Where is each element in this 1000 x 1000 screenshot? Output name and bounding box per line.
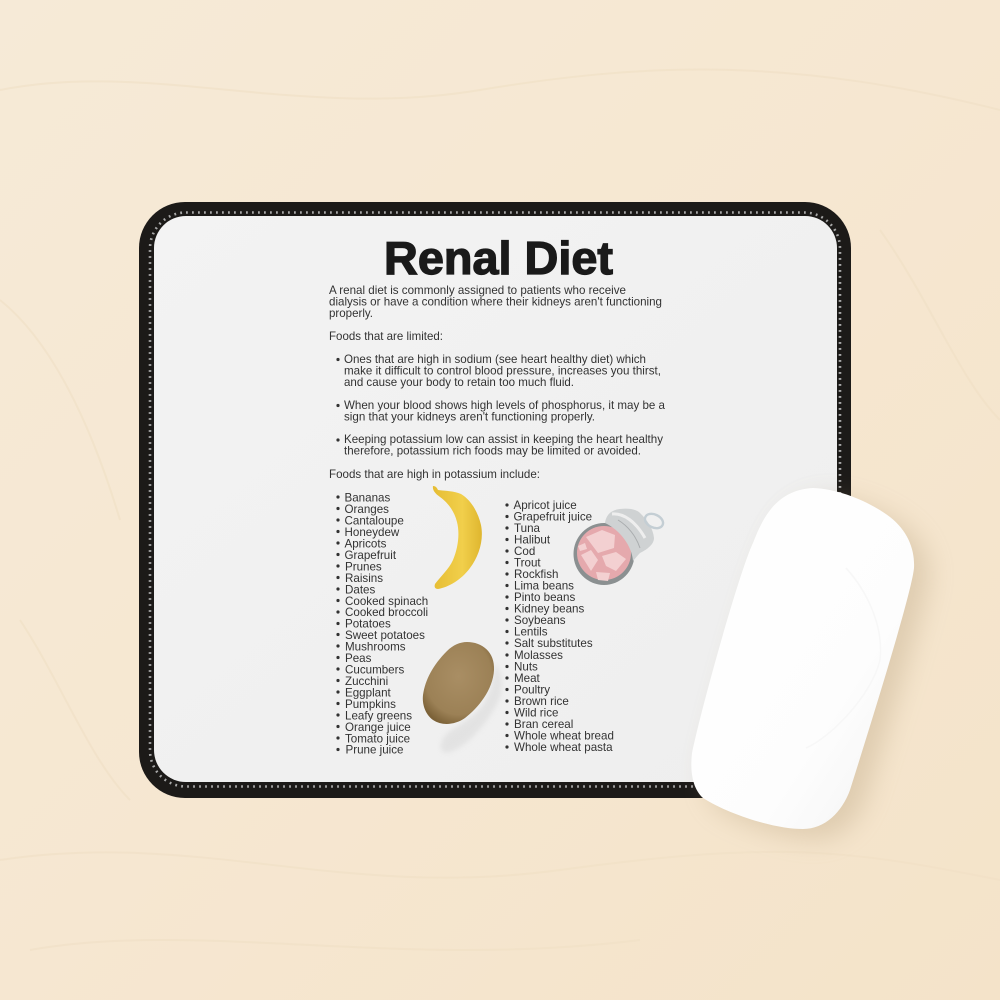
right food list: Kidney beans xyxy=(514,602,584,616)
icon: banana xyxy=(433,486,482,589)
right food list: Salt substitutes xyxy=(514,637,593,650)
right food list: Cod xyxy=(514,545,535,558)
left food list: Raisins xyxy=(345,572,383,585)
left food list: Cooked broccoli xyxy=(345,606,428,619)
left food list: Pumpkins xyxy=(345,698,396,711)
right food list: Halibut xyxy=(514,534,551,546)
right food list: Bran cereal xyxy=(514,718,573,731)
right food list: Lima beans xyxy=(514,580,574,592)
tuna meat xyxy=(577,526,631,580)
right food list: Lentils xyxy=(514,626,548,638)
left food list: Zucchini xyxy=(345,675,388,688)
mouse pad xyxy=(139,202,851,798)
mouse shadow xyxy=(706,498,929,839)
right food list: Brown rice xyxy=(514,695,569,708)
left food list: Cantaloupe xyxy=(344,514,404,528)
left food list: Bananas xyxy=(344,492,390,504)
phosphorus bullet: sign that your kidneys aren't functioning properly. xyxy=(344,410,595,424)
intro paragraph: properly. xyxy=(329,307,373,320)
right food list: Wild rice xyxy=(514,706,558,720)
phosphorus bullet: When your blood shows high levels of phosphorus, it may be a xyxy=(344,399,666,412)
right food list: Grapefruit juice xyxy=(514,510,592,524)
icon: potato xyxy=(423,642,502,753)
intro paragraph: A renal diet is commonly assigned to patients who receive xyxy=(329,284,626,297)
title: Renal Diet xyxy=(384,232,613,284)
right food list: Tuna xyxy=(514,522,541,535)
wireless mouse xyxy=(691,488,929,839)
potassium bullet xyxy=(336,433,663,458)
right food list: Apricot juice xyxy=(514,499,577,512)
potato shadow xyxy=(441,664,502,753)
left food list: Eggplant xyxy=(345,686,392,700)
left food list: Cucumbers xyxy=(345,664,404,676)
right food list: Soybeans xyxy=(514,614,566,627)
left food list: Leafy greens xyxy=(345,710,412,722)
border stitches xyxy=(150,212,840,786)
left food list: Sweet potatoes xyxy=(345,629,425,642)
can rim xyxy=(574,523,634,585)
right food list xyxy=(505,499,614,754)
icon: open tuna can xyxy=(574,509,665,585)
peeled lid xyxy=(605,509,654,561)
potassium bullet: therefore, potassium rich foods may be limited or avoided. xyxy=(344,444,641,458)
right food list: Pinto beans xyxy=(514,591,575,604)
mouse highlight xyxy=(806,568,881,748)
right food list: Meat xyxy=(514,672,541,685)
left food list: Peas xyxy=(345,652,372,665)
right food list: Poultry xyxy=(514,684,550,696)
limited foods heading: Foods that are limited: xyxy=(329,330,443,343)
potassium foods heading: Foods that are high in potassium include: xyxy=(329,468,540,481)
left food list: Grapefruit xyxy=(344,549,397,562)
left food list: Tomato juice xyxy=(345,732,410,746)
intro paragraph xyxy=(329,284,662,320)
right food list: Molasses xyxy=(514,649,563,662)
left food list: Dates xyxy=(345,584,375,596)
pull ring xyxy=(643,511,665,531)
mouse body xyxy=(691,488,914,829)
sodium bullet: and cause your body to retain too much fluid. xyxy=(344,376,574,389)
phosphorus bullet xyxy=(336,399,666,424)
right food list: Trout xyxy=(514,556,541,570)
right food list: Whole wheat bread xyxy=(514,730,614,742)
right food list: Nuts xyxy=(514,660,538,674)
left food list: Mushrooms xyxy=(345,640,406,654)
left food list xyxy=(336,492,428,756)
left food list: Potatoes xyxy=(345,618,391,630)
pad stitched black border xyxy=(139,202,851,798)
left food list: Prune juice xyxy=(346,744,404,756)
right food list: Whole wheat pasta xyxy=(514,741,613,754)
sodium bullet: Ones that are high in sodium (see heart healthy diet) which xyxy=(344,353,646,366)
intro and limited foods text xyxy=(329,284,666,756)
left food list: Cooked spinach xyxy=(345,595,428,608)
left food list: Orange juice xyxy=(345,721,411,734)
left food list: Prunes xyxy=(345,560,382,574)
pad printed surface xyxy=(154,216,837,782)
intro paragraph: dialysis or have a condition where their kidneys aren't functioning xyxy=(329,296,662,308)
potato body xyxy=(423,642,494,724)
sodium bullet: make it difficult to control blood pressure, increases you thirst, xyxy=(344,364,661,378)
left food list: Honeydew xyxy=(344,526,400,539)
left food list: Oranges xyxy=(344,503,389,516)
potassium bullet: Keeping potassium low can assist in keeping the heart healthy xyxy=(344,433,663,446)
right food list: Rockfish xyxy=(514,568,558,581)
sodium bullet xyxy=(336,353,661,389)
left food list: Apricots xyxy=(344,538,387,550)
